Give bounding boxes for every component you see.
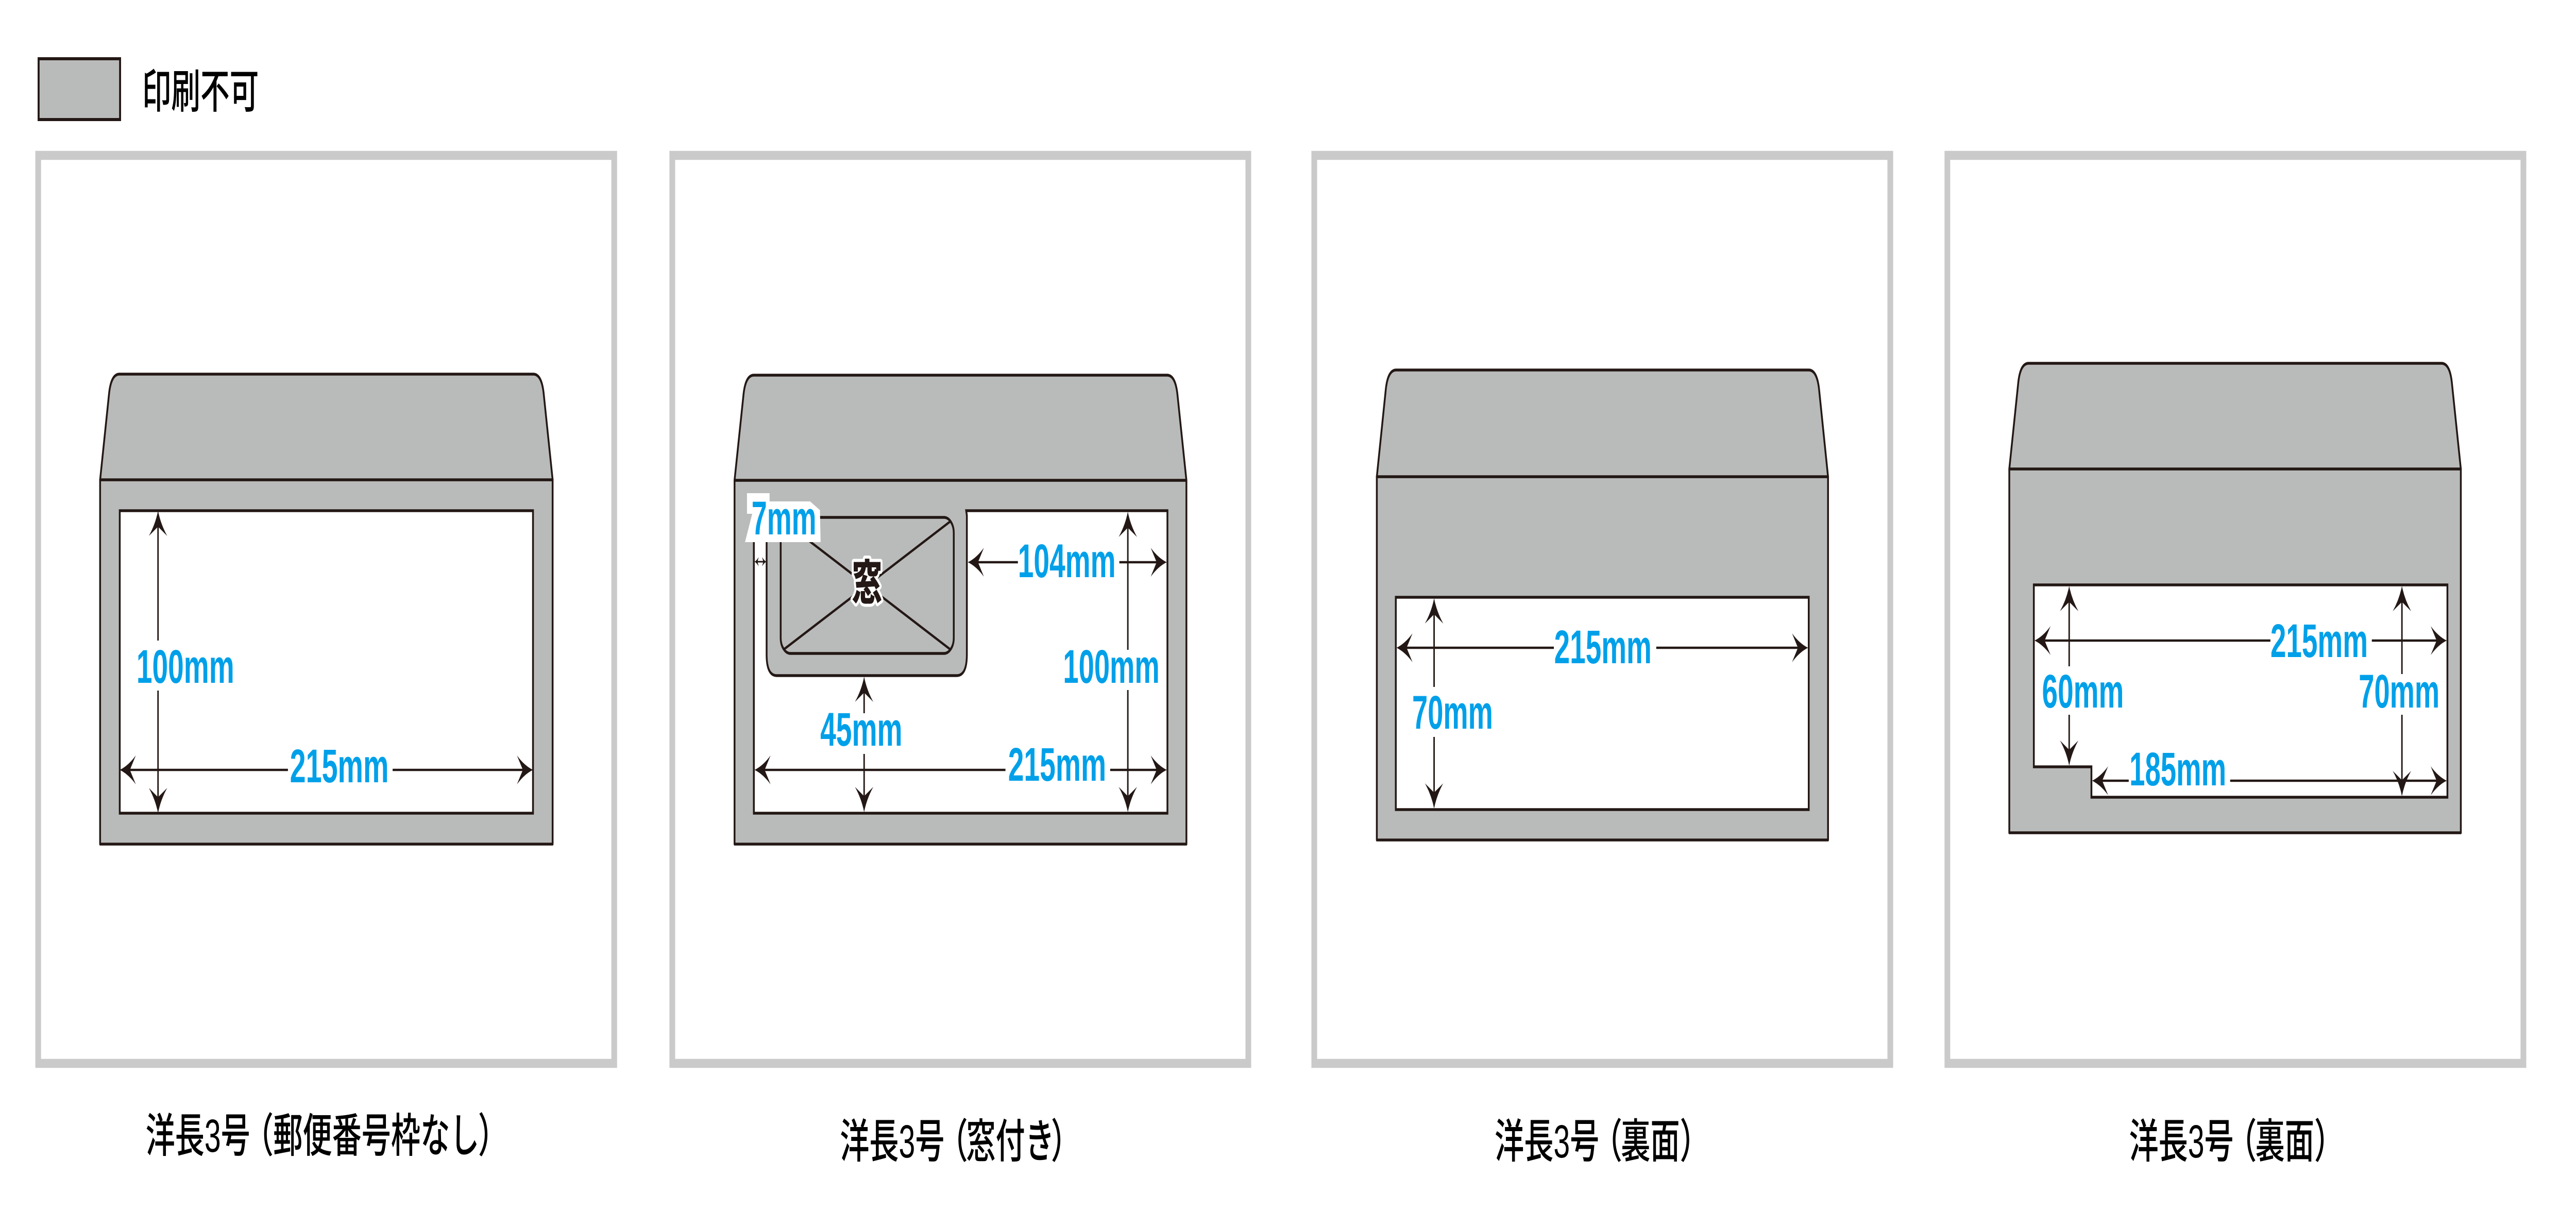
panel: 洋長3号 裏面 — [1314, 156, 1890, 1167]
caption: （ — [938, 1116, 968, 1167]
caption — [840, 1116, 1080, 1167]
dimension: 215mm width — [2035, 615, 2447, 667]
dimension: 60mm height: 60mm — [2042, 665, 2124, 718]
dimension: 100mm height — [1063, 512, 1160, 812]
envelope body — [100, 480, 553, 844]
dimension: 215mm width: 215mm — [1554, 621, 1652, 674]
envelope body — [1377, 477, 1828, 840]
caption — [2129, 1116, 2344, 1167]
caption: ） — [1051, 1116, 1080, 1167]
caption: 裏面 — [1621, 1116, 1680, 1167]
caption: 洋長3号 — [2129, 1116, 2234, 1167]
dimension: 215mm width: 215mm — [1008, 738, 1106, 791]
dimension: 45mm: 45mm — [820, 703, 903, 756]
legend label: 印刷不可 — [142, 66, 259, 117]
dimension: 100mm height: 100mm — [137, 641, 234, 693]
dimension: 70mm height: 70mm — [2359, 665, 2439, 718]
dimension: 60mm height — [2042, 586, 2124, 766]
caption: ） — [478, 1110, 507, 1162]
caption: （ — [1593, 1116, 1622, 1167]
caption — [146, 1110, 507, 1162]
caption: 裏面 — [2256, 1116, 2314, 1167]
dimension: 104mm — [968, 535, 1167, 587]
printable area with step — [2034, 585, 2447, 797]
dimension: 7mm margin — [745, 492, 821, 566]
caption: （ — [2227, 1116, 2257, 1167]
dimension: 215mm width: 215mm — [2270, 615, 2368, 667]
dimension: 215mm width — [754, 738, 1167, 791]
caption: ） — [2314, 1116, 2344, 1167]
dimension: 185mm width — [2092, 743, 2447, 796]
caption: 洋長3号 — [1495, 1116, 1599, 1167]
dimension: 70mm height — [1412, 598, 1493, 809]
dimension: 215mm width: 215mm — [290, 740, 388, 793]
panel frame — [38, 156, 614, 1064]
dimension: 100mm height: 100mm — [1063, 641, 1160, 693]
dimension: 70mm height: 70mm — [1412, 686, 1493, 739]
dimension: 215mm width — [1397, 621, 1808, 674]
dimension: 185mm width: 185mm — [2129, 743, 2226, 796]
panel frame — [1314, 156, 1890, 1064]
printable area — [1396, 597, 1809, 810]
envelope flap — [100, 374, 553, 480]
panel frame — [672, 156, 1248, 1064]
legend: non-printable area — [39, 59, 259, 120]
window — [781, 517, 954, 653]
panel: 洋長3号 窓付き — [672, 156, 1248, 1167]
envelope flap — [735, 375, 1187, 480]
dimension: 104mm: 104mm — [1018, 535, 1116, 587]
caption: 郵便番号枠なし — [273, 1110, 479, 1162]
envelope body — [2009, 469, 2461, 833]
window: 窓 — [852, 557, 882, 610]
envelope body — [735, 480, 1187, 844]
panel: 洋長3号 裏面 段差あり — [1947, 156, 2523, 1167]
dimension: 7mm margin: 7mm — [752, 492, 817, 545]
printable area — [120, 511, 533, 813]
panel: 洋長3号 郵便番号枠なし — [38, 156, 614, 1162]
dimension: 215mm width — [120, 740, 533, 793]
envelope flap — [2009, 363, 2461, 469]
dimension: 45mm — [820, 677, 903, 812]
caption: ） — [1680, 1116, 1709, 1167]
caption: （ — [244, 1110, 274, 1162]
caption: 窓付き — [966, 1116, 1055, 1167]
dimension: 100mm height — [137, 511, 234, 813]
envelope flap — [1377, 370, 1828, 477]
printable area with window cut-out — [754, 511, 1167, 813]
panel frame — [1947, 156, 2523, 1064]
legend swatch — [39, 59, 120, 120]
caption: 洋長3号 — [146, 1110, 250, 1162]
caption — [1495, 1116, 1709, 1167]
caption: 洋長3号 — [840, 1116, 944, 1167]
dimension: 70mm height — [2359, 586, 2439, 796]
